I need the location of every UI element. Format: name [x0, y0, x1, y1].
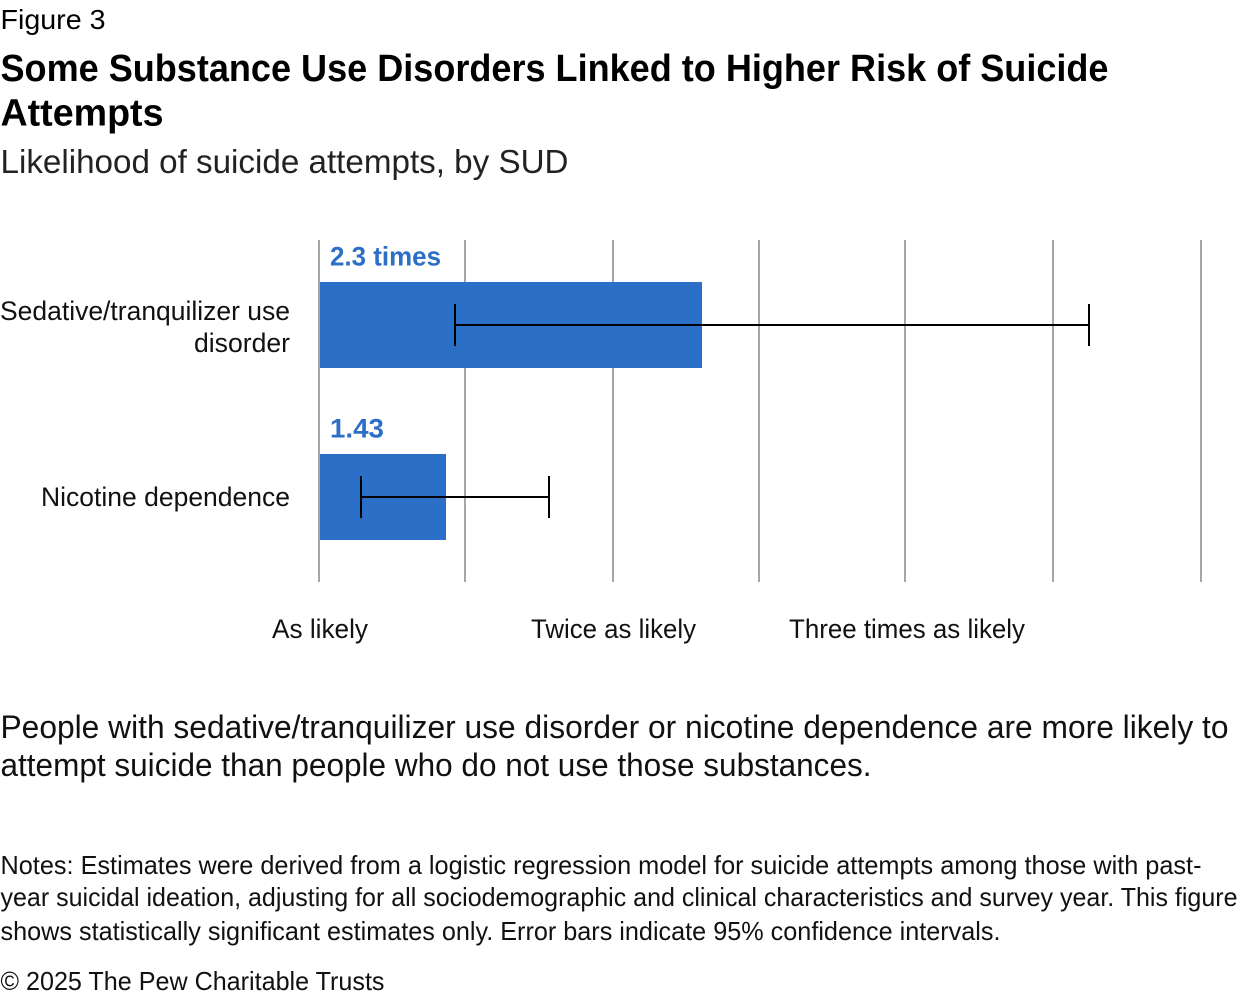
- figure label: Figure 3: [0, 4, 106, 35]
- category label: sedative/tranquilizer: [0, 296, 290, 358]
- bar: sedative/tranquilizer: [320, 282, 702, 368]
- axis labels: [272, 614, 1025, 644]
- notes: [0, 850, 1238, 946]
- notes: shows statistically significant estimates only. Error bars indicate 95% confidence intervals.: [0, 916, 1000, 946]
- axis labels: Twice as likely: [531, 614, 696, 644]
- subtitle: Likelihood of suicide attempts, by SUD: [0, 143, 568, 180]
- title: Some Substance Use Disorders Linked to Higher Risk of Suicide: [0, 48, 1108, 90]
- category label: sedative/tranquilizer: disorder: [194, 328, 290, 358]
- chart: [0, 240, 1201, 644]
- error bar: nicotine: [361, 476, 549, 518]
- bar: nicotine: [320, 454, 446, 540]
- title: [0, 48, 1108, 134]
- takeaway text: People with sedative/tranquilizer use disorder or nicotine dependence are more likely to: [0, 709, 1228, 745]
- axis labels: Three times as likely: [789, 614, 1025, 644]
- category label: sedative/tranquilizer: Sedative/tranquilizer use: [0, 296, 290, 326]
- copyright: © 2025 The Pew Charitable Trusts: [0, 966, 384, 996]
- value label: 1.43: 1.43: [330, 414, 384, 444]
- title: Attempts: [0, 92, 164, 134]
- error bar: sedative/tranquilizer: [455, 304, 1089, 346]
- category label: nicotine: Nicotine dependence: [41, 482, 290, 512]
- takeaway text: [0, 709, 1228, 783]
- notes: Notes: Estimates were derived from a logistic regression model for suicide attempts among those with past-: [0, 850, 1202, 880]
- axis labels: As likely: [272, 614, 368, 644]
- takeaway text: attempt suicide than people who do not use those substances.: [0, 747, 872, 783]
- value label: 2.3 times: 2.3 times: [330, 242, 441, 272]
